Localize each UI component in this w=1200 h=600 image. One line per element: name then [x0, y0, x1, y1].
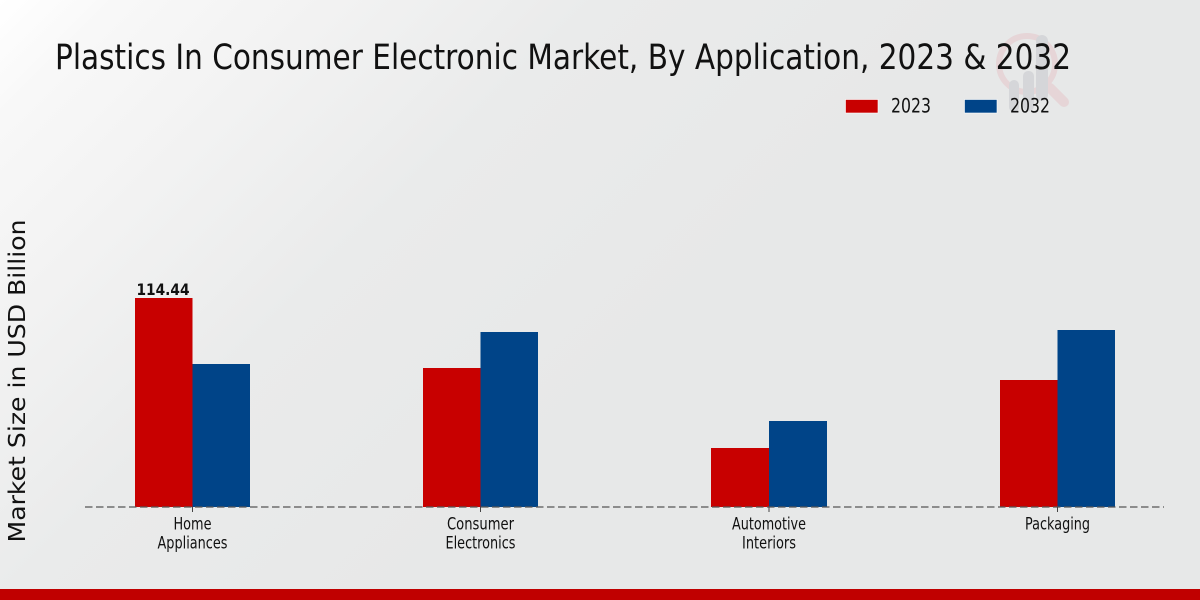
bars: Packaging: [1000, 330, 1115, 507]
bottom bar: [0, 589, 1200, 600]
category label: Consumer Electronics: [446, 507, 516, 552]
category label: Packaging: [1025, 507, 1090, 534]
bars: Consumer Electronics: [423, 332, 538, 507]
legend label 2032: 2032: [1010, 94, 1050, 118]
category label: Home Appliances: Appliances: [158, 534, 228, 552]
legend: [846, 94, 1050, 118]
legend swatch 2032: [964, 100, 997, 113]
baseline: [85, 506, 1164, 508]
category label: Automotive Interiors: Automotive: [732, 514, 806, 534]
category label: Consumer Electronics: Electronics: [446, 534, 516, 552]
category label: Home Appliances: [158, 507, 228, 552]
bars: Home Appliances: [135, 298, 250, 507]
watermark logo icon: [999, 35, 1064, 112]
y axis title: Market Size in USD Billion: [3, 220, 31, 542]
category label: Consumer Electronics: Consumer: [447, 514, 514, 534]
bar chart: [85, 280, 1164, 552]
legend swatch 2023: [846, 100, 878, 113]
category label: Automotive Interiors: [732, 507, 806, 552]
bars: Automotive Interiors: [711, 421, 827, 507]
legend label 2023: 2023: [891, 94, 931, 118]
value label: 114.44: [136, 280, 190, 299]
category label: Packaging: Packaging: [1025, 514, 1090, 534]
category label: Home Appliances: Home: [174, 514, 212, 534]
category label: Automotive Interiors: Interiors: [742, 534, 796, 552]
